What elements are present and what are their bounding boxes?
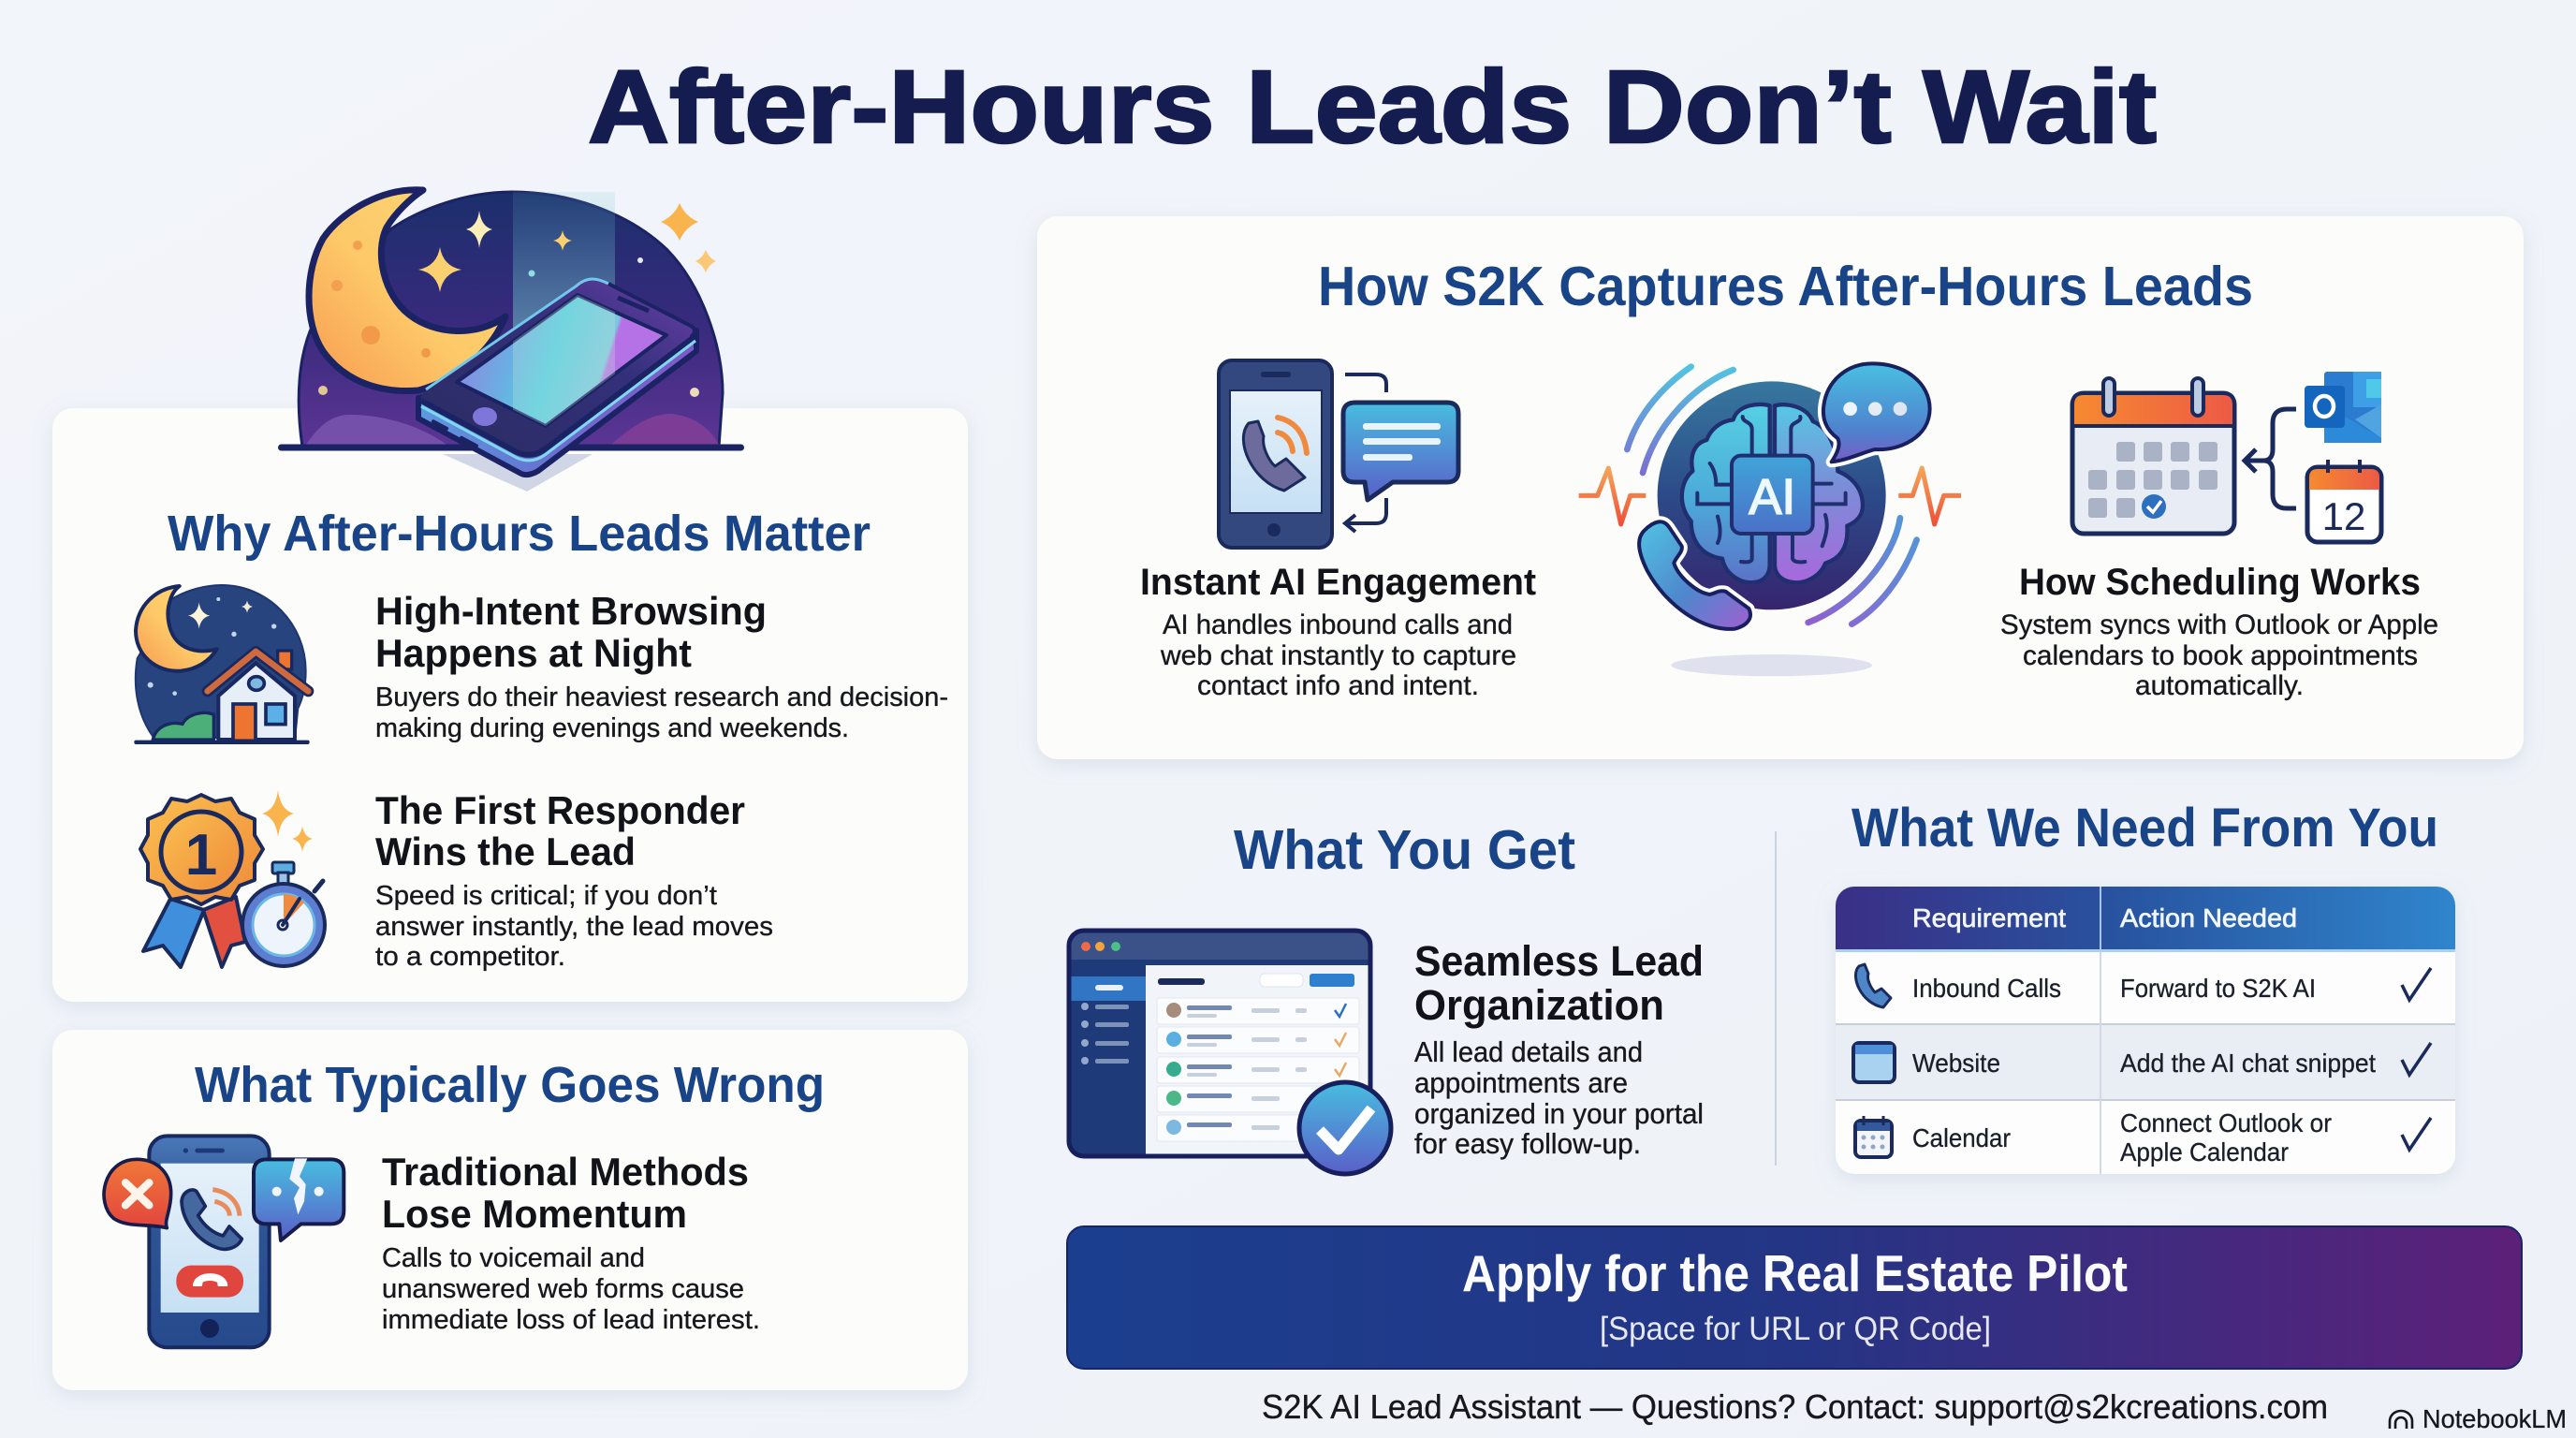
text: instant ai engagement: AI handles inbound calls and (1163, 609, 1513, 640)
heading: how s2k captures: How S2K Captures After-Hours Leads (1318, 256, 2253, 317)
row: website (1853, 1043, 2431, 1082)
text: the first responder: answer instantly, the lead moves (375, 912, 773, 942)
icon: medal and stopwatch (140, 790, 325, 967)
text: seamless lead organization (1414, 937, 1704, 1160)
table header: Requirement (1912, 903, 2066, 932)
title: After-Hours Leads Don’t Wait (588, 50, 2157, 165)
text: instant ai engagement: Instant AI Engagement (1140, 562, 1536, 603)
text: seamless lead organization: organized in your portal (1414, 1097, 1704, 1130)
row: website: Website (1912, 1049, 2000, 1078)
text: how scheduling works: calendars to book appointments (2023, 640, 2418, 671)
icon: phone and chat (1219, 360, 1458, 548)
text: how scheduling works: How Scheduling Works (2019, 562, 2421, 603)
row: calendar: Connect Outlook or (2120, 1108, 2332, 1137)
section: what we need from you (1836, 798, 2455, 1174)
text: how scheduling works: automatically. (2135, 670, 2304, 701)
text: seamless lead organization: Seamless Lead (1414, 937, 1704, 985)
text: instant ai engagement: contact info and intent. (1197, 670, 1479, 701)
call to action banner: [Space for URL or QR Code] (1600, 1311, 1991, 1347)
text: high-intent browsing (375, 589, 948, 743)
icon: failed call phone (104, 1136, 344, 1347)
icon: ai brain (1579, 363, 1961, 676)
row: inbound calls: Forward to S2K AI (2120, 974, 2316, 1003)
text: the first responder: to a competitor. (375, 942, 565, 972)
panel: what typically goes wrong (52, 1030, 968, 1390)
icon: moon, night dome and phone (278, 190, 744, 492)
text: seamless lead organization: All lead details and (1414, 1035, 1643, 1068)
text: the first responder: Wins the Lead (375, 829, 636, 873)
row: inbound calls: Inbound Calls (1912, 974, 2061, 1003)
section: what you get (1069, 819, 1704, 1174)
text: high-intent browsing: Happens at Night (375, 631, 692, 675)
text: the first responder: Speed is critical; if you don’t (375, 881, 717, 911)
icon: medal and stopwatch: 1 (185, 823, 217, 888)
text: traditional methods: unanswered web forms cause (382, 1274, 744, 1304)
text: how scheduling works (2000, 562, 2438, 701)
text: high-intent browsing: High-Intent Browsing (375, 589, 767, 633)
icon: ai brain: AI (1749, 469, 1795, 524)
heading: what you get: What You Get (1234, 819, 1575, 881)
text: high-intent browsing: making during evenings and weekends. (375, 713, 849, 743)
row: calendar: Calendar (1912, 1123, 2011, 1152)
table header (1912, 903, 2297, 932)
text: the first responder: The First Responder (375, 788, 745, 832)
notebooklm watermark: NotebookLM (2422, 1404, 2567, 1433)
table header: Action Needed (2120, 903, 2297, 932)
heading: what we need from you: What We Need From You (1852, 798, 2438, 858)
icon: lead portal window (1069, 931, 1391, 1174)
icon: calendar sync: 12 (2322, 494, 2365, 538)
icon: calendar sync (2072, 372, 2381, 542)
call to action banner (1067, 1226, 2522, 1369)
heading: what typically goes wrong: What Typically Goes Wrong (195, 1057, 825, 1113)
row: website: Add the AI chat snippet (2120, 1049, 2376, 1078)
text: traditional methods: Traditional Methods (382, 1150, 749, 1194)
row: calendar: Apple Calendar (2120, 1137, 2289, 1167)
call to action banner: Apply for the Real Estate Pilot (1462, 1244, 2128, 1302)
text: seamless lead organization: for easy follow-up. (1414, 1127, 1641, 1160)
text: high-intent browsing: Buyers do their heaviest research and decision- (375, 682, 948, 712)
text: traditional methods (382, 1150, 760, 1335)
row: calendar (1855, 1108, 2431, 1167)
panel: how s2k captures after-hours leads (1037, 216, 2524, 759)
text: instant ai engagement: web chat instantly to capture (1160, 640, 1516, 671)
text: traditional methods: Calls to voicemail and (382, 1243, 645, 1273)
text: instant ai engagement (1140, 562, 1536, 701)
text: seamless lead organization: Organization (1414, 981, 1664, 1029)
footer contact line: S2K AI Lead Assistant — Questions? Contact: support@s2kcreations.com (1262, 1387, 2328, 1426)
text: seamless lead organization: appointments are (1414, 1066, 1628, 1099)
heading: why after-hours leads matter: Why After-Hours Leads Matter (168, 506, 871, 562)
icon: moon and house (134, 585, 310, 744)
panel: why after-hours leads matter (52, 408, 968, 1002)
table: requirements (1836, 887, 2455, 1174)
row: inbound calls (1855, 964, 2431, 1007)
text: traditional methods: immediate loss of lead interest. (382, 1305, 760, 1335)
text: traditional methods: Lose Momentum (382, 1192, 687, 1236)
text: how scheduling works: System syncs with Outlook or Apple (2000, 609, 2438, 640)
text: the first responder (375, 788, 773, 972)
